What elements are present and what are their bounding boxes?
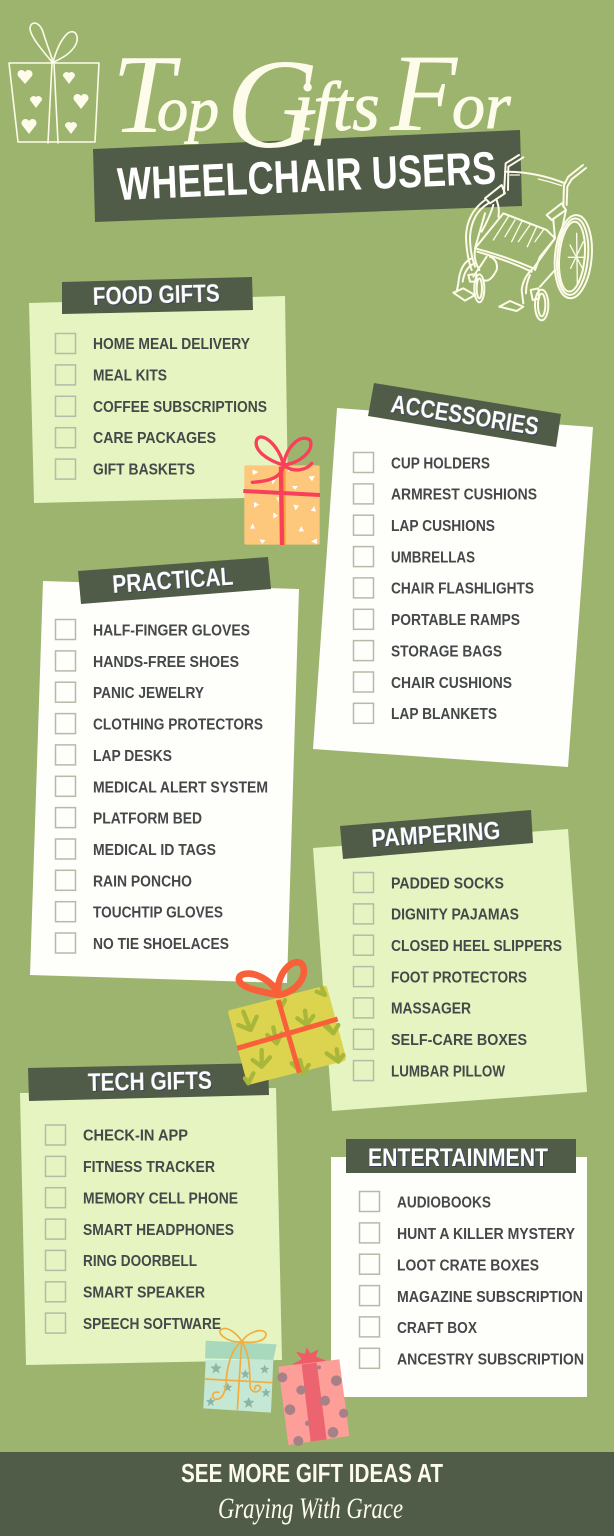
checklist: accessories [354,452,537,723]
checklist: accessories: LAP BLANKETS [391,706,497,723]
checklist: entertainment: MAGAZINE SUBSCRIPTION [397,1289,583,1306]
panel: pampering [313,810,587,1111]
checklist: practical: HALF-FINGER GLOVES [93,622,250,640]
heading: practical [78,557,271,604]
panel: tech gifts [20,1063,282,1365]
checklist: entertainment: LOOT CRATE BOXES [397,1257,539,1274]
checklist: pampering: FOOT PROTECTORS [391,969,527,986]
checklist: accessories: UMBRELLAS [391,549,475,566]
heading: food gifts: FOOD GIFTS [92,280,220,311]
title: top gifts for: G [226,33,318,175]
checklist: food gifts: CARE PACKAGES [93,430,216,447]
icon: mint gift box with yellow ribbon [203,1329,277,1413]
checklist: tech gifts: FITNESS TRACKER [83,1159,215,1176]
checklist: pampering: LUMBAR PILLOW [391,1063,506,1080]
heading: pampering: PAMPERING [371,817,501,853]
checklist: accessories: CUP HOLDERS [391,455,490,472]
checklist: pampering: CLOSED HEEL SLIPPERS [391,938,562,955]
checklist: pampering: SELF-CARE BOXES [391,1032,527,1049]
checklist: tech gifts: RING DOORBELL [83,1253,197,1270]
checklist: practical [56,620,268,953]
checklist: food gifts: HOME MEAL DELIVERY [93,336,250,353]
heading: pampering [340,810,533,859]
footer text: see more gift ideas: SEE MORE GIFT IDEAS AT [181,1458,443,1488]
icon: yellow gift box with orange bow [228,962,346,1085]
icon: pink gift box with polka dots [277,1347,349,1446]
heading: food gifts [62,277,253,314]
checklist: practical: HANDS-FREE SHOES [93,654,239,671]
icon: outlined gift box with hearts [9,23,99,143]
checklist: entertainment: CRAFT BOX [397,1320,477,1337]
checklist: accessories: CHAIR CUSHIONS [391,675,512,692]
checklist: accessories: PORTABLE RAMPS [391,612,520,629]
checklist: entertainment: AUDIOBOOKS [397,1195,491,1212]
checklist: food gifts: GIFT BASKETS [93,462,195,479]
panel: entertainment [331,1139,587,1397]
heading: practical: PRACTICAL [111,563,234,599]
checklist: practical: MEDICAL ALERT SYSTEM [93,779,268,796]
icon: wheelchair line drawing [453,155,595,320]
checklist: pampering [354,872,562,1081]
checklist: practical: CLOTHING PROTECTORS [93,717,263,734]
panel: practical [30,557,299,983]
checklist: food gifts: COFFEE SUBSCRIPTIONS [93,399,267,416]
checklist: tech gifts: SMART HEADPHONES [83,1222,234,1239]
footer banner [0,1452,614,1536]
checklist: tech gifts: CHECK-IN APP [83,1128,188,1145]
checklist: accessories: ARMREST CUSHIONS [391,487,537,504]
checklist: practical: NO TIE SHOELACES [93,936,229,953]
checklist: practical: RAIN PONCHO [93,873,192,890]
checklist: tech gifts: SPEECH SOFTWARE [83,1316,221,1333]
title: top gifts for: op [157,76,219,144]
title: top gifts for: or [452,70,511,143]
checklist: pampering: PADDED SOCKS [391,875,504,892]
checklist: practical: LAP DESKS [93,748,172,765]
checklist: tech gifts [46,1125,238,1333]
title: top gifts for: ifts [294,69,380,146]
checklist: practical: PLATFORM BED [93,811,202,828]
heading: tech gifts [28,1063,269,1101]
title: top gifts for: T [112,33,181,157]
heading banner: wheelchair users [93,130,522,222]
panel: food gifts [29,277,288,503]
heading: tech gifts: TECH GIFTS [88,1067,212,1097]
checklist: entertainment: ANCESTRY SUBSCRIPTION [397,1352,584,1368]
checklist: pampering: MASSAGER [391,1001,471,1018]
checklist: tech gifts: SMART SPEAKER [83,1284,205,1302]
heading: accessories: ACCESSORIES [389,390,541,441]
checklist: practical: PANIC JEWELRY [93,685,204,702]
checklist: pampering: DIGNITY PAJAMAS [391,907,519,924]
checklist: accessories: LAP CUSHIONS [391,518,495,535]
heading banner: wheelchair users: WHEELCHAIR USERS [116,142,497,210]
panel: accessories [313,383,593,767]
checklist: tech gifts: MEMORY CELL PHONE [83,1190,238,1207]
footer text: graying with grace: Graying With Grace [218,1492,403,1525]
checklist: practical: TOUCHTIP GLOVES [93,905,223,922]
checklist: practical: MEDICAL ID TAGS [93,842,216,859]
checklist: accessories: STORAGE BAGS [391,643,502,660]
checklist: accessories: CHAIR FLASHLIGHTS [391,581,534,598]
icon: orange gift box with red bow [243,437,320,545]
heading: entertainment: ENTERTAINMENT [368,1144,548,1172]
checklist: food gifts [56,334,267,479]
checklist: entertainment [360,1192,584,1368]
title: top gifts for: F [389,32,459,154]
checklist: entertainment: HUNT A KILLER MYSTERY [397,1226,575,1243]
checklist: food gifts: MEAL KITS [93,367,167,384]
